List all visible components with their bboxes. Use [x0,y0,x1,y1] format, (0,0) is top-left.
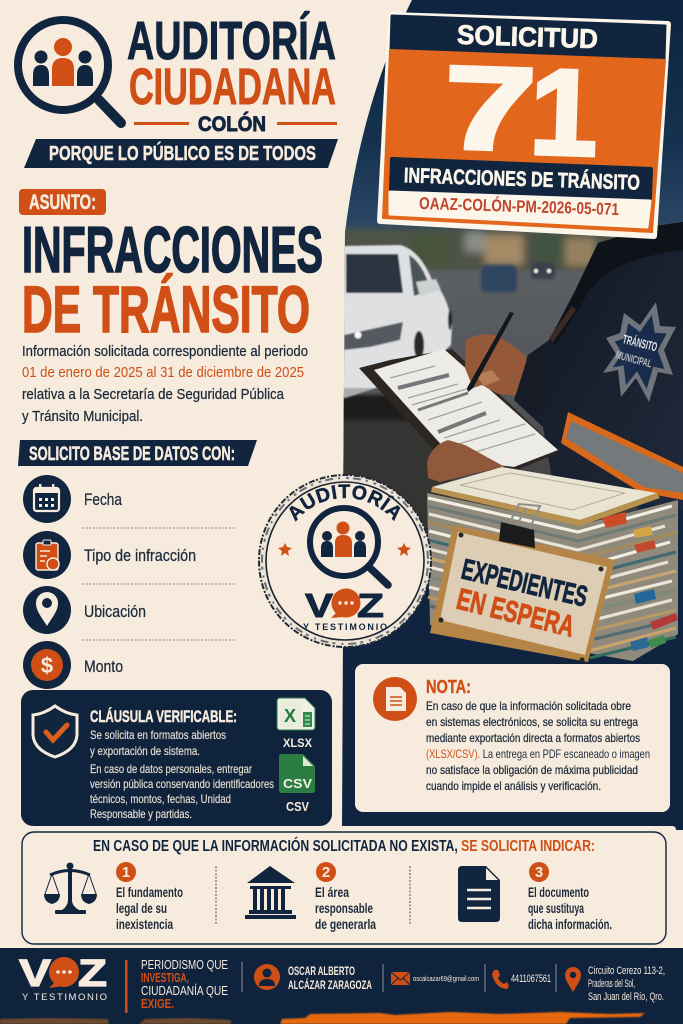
title [127,11,337,136]
footer voz logo [19,953,107,1003]
field: ubicacion [23,586,146,634]
clause text: En caso de datos personales, entregar [90,762,252,776]
request description [22,343,308,425]
field: monto [23,641,123,689]
field: fecha [23,475,123,523]
request description: 01 de enero de 2025 al 31 de diciembre de 2025 [22,364,304,381]
paper stack [427,467,678,661]
stamp stars [278,543,411,556]
request description: relativa a la Secretaría de Seguridad Pública [22,386,285,403]
item 3: replacement document: que sustituya [528,901,584,916]
clipboard and form [359,349,560,471]
icon: xlsx file: X [284,706,296,726]
stamp voz logo: Y TESTIMONIO [303,622,387,632]
stamp: auditoria voz y testimonio [258,474,432,648]
footer voz logo: Y TESTIMONIO [22,992,107,1003]
clause text: Responsable y partidas. [90,807,192,821]
footer voz logo: Z [78,953,107,995]
section ribbon: solicito base de datos: SOLICITO BASE DE DATOS CON: [29,444,235,465]
panel: if information does not exist [22,832,666,944]
item 3: replacement document: 3 [535,864,543,881]
clause text: CLÁUSULA VERIFICABLE: [90,707,237,726]
icon: shield check [33,706,77,757]
footer motto: CIUDADANÍA QUE [141,983,228,998]
field: tipo de infraccion: Tipo de infracción [84,547,196,565]
note text: en sistemas electrónicos, se solicita su entrega [426,715,638,729]
field: tipo de infraccion [23,531,196,579]
footer author [254,964,372,992]
item 1: legal basis: inexistencia [116,917,173,932]
panel: clausula verificable [21,690,332,826]
street scene [341,0,683,528]
footer email: oscalcazar69@gmail.com [413,976,479,983]
sign text: EN ESPERA [453,583,578,644]
icon: xlsx file: XLSX [283,736,312,750]
footer phone [492,970,551,989]
bottom cream band [341,826,676,948]
list: data fields [23,475,196,689]
officer jacket [514,222,683,510]
clause text: Se solicita en formatos abiertos [90,728,226,742]
footer motto: INVESTIGA, [141,971,189,985]
white car [341,245,452,398]
hand holding pen [465,312,526,396]
clause text: y exportación de sistema. [90,744,200,758]
icon: document [458,866,500,922]
tagline ribbon [24,139,338,168]
footer author: ALCÁZAR ZARAGOZA [288,979,372,992]
item 1: legal basis: 1 [122,864,130,881]
footer phone: 4411067561 [511,973,551,985]
clause text: técnicos, montos, fechas, Unidad [90,792,231,806]
note text: En caso de que la información solicitada obre [426,699,631,713]
item 1: legal basis: El fundamento [116,885,183,900]
stamp: auditoria voz y testimonio: AUDITORÍA [289,484,400,522]
footer address: Praderas del Sol, [588,978,635,990]
footer motto: PERIODISMO QUE [141,958,228,972]
footer [0,948,683,1024]
header logo: magnifying glass with citizens [18,20,121,123]
badge: Tránsito Municipal [603,302,676,402]
item 3: replacement document: El documento [528,885,589,900]
card folio: OAAZ-COLÓN-PM-2026-05-071 [419,194,619,219]
main heading: DE TRÁNSITO [22,272,310,346]
field: ubicacion: Ubicación [84,603,146,621]
sign text: EXPEDIENTES [458,554,590,614]
stamp voz logo: V [305,587,333,624]
clause text [90,707,274,821]
stamp voz logo: Z [357,587,384,624]
field: monto: $ [41,653,53,678]
asunto tag: ASUNTO: [29,191,96,214]
right navy area [342,0,683,830]
title: CIUDADANA [129,58,336,115]
item 3: replacement document [458,862,612,932]
item 3: replacement document: dicha información. [528,917,612,932]
footer motto: EXIGE. [141,997,174,1011]
panel heading: EN CASO DE QUE LA INFORMACIÓN SOLICITADA NO EXISTA, SE SOLICITA INDICAR: [93,837,595,855]
note text [426,699,650,793]
field: monto: Monto [84,658,123,676]
colored tabs [602,512,678,651]
tagline ribbon: PORQUE LO PÚBLICO ES DE TODOS [49,141,316,165]
stamp voz logo [303,587,387,632]
icon: csv file: CSV [286,800,310,814]
footer voz logo: V [19,953,52,995]
icon: xlsx file [277,698,315,750]
note text: mediante exportación directa a formatos abiertos [426,731,640,745]
card number: 7 [442,42,538,177]
icon: csv file: CSV [283,776,312,791]
note text: cuando impide el análisis y verificación. [426,779,601,793]
card: solicitud 71 [380,15,668,236]
item 2: responsible area [245,862,376,932]
stamp arc text [290,498,400,530]
item 2: responsible area: responsable [315,901,373,916]
card number: 1 [528,43,600,181]
request description: y Tránsito Municipal. [22,408,143,425]
field: fecha: Fecha [84,491,123,509]
title: COLÓN [198,112,266,136]
stamp magnifier [310,508,388,585]
request description: Información solicitada correspondiente al periodo [22,343,308,360]
footer motto [141,958,228,1011]
binder clip [499,504,540,548]
photo: traffic officer filling out a form [341,0,683,662]
icon: csv file [279,754,315,814]
people [33,38,93,86]
badge: Tránsito Municipal: MUNICIPAL [614,349,653,371]
icon: document [373,677,417,721]
asunto tag [19,189,106,215]
lower hand [427,440,505,482]
note heading: NOTA: [426,677,471,697]
sign text [456,558,588,638]
item 1: legal basis [44,862,183,932]
icon: institution building [245,866,296,919]
note text: no satisface la obligación de máxima publicidad [426,763,638,777]
item 1: legal basis: legal de su [116,901,167,916]
item 2: responsible area: El área [315,885,349,900]
card heading: SOLICITUD [457,20,598,54]
footer address [565,965,665,1003]
clause text: versión pública conservando identificadores [90,777,274,791]
sign: expedientes en espera [430,525,615,662]
footer email [391,972,479,985]
title: AUDITORÍA [127,11,336,71]
panel: nota [355,664,670,812]
reflective band [561,412,683,500]
section ribbon: solicito base de datos [18,440,257,466]
icon: scales [44,862,97,914]
card number [442,41,600,181]
footer author: OSCAR ALBERTO [288,966,355,978]
item 2: responsible area: de generarla [315,917,376,932]
item 2: responsible area: 2 [322,864,330,881]
main heading: INFRACCIONES [22,213,323,286]
footer brush strokes [0,1012,645,1024]
main heading [22,213,323,346]
